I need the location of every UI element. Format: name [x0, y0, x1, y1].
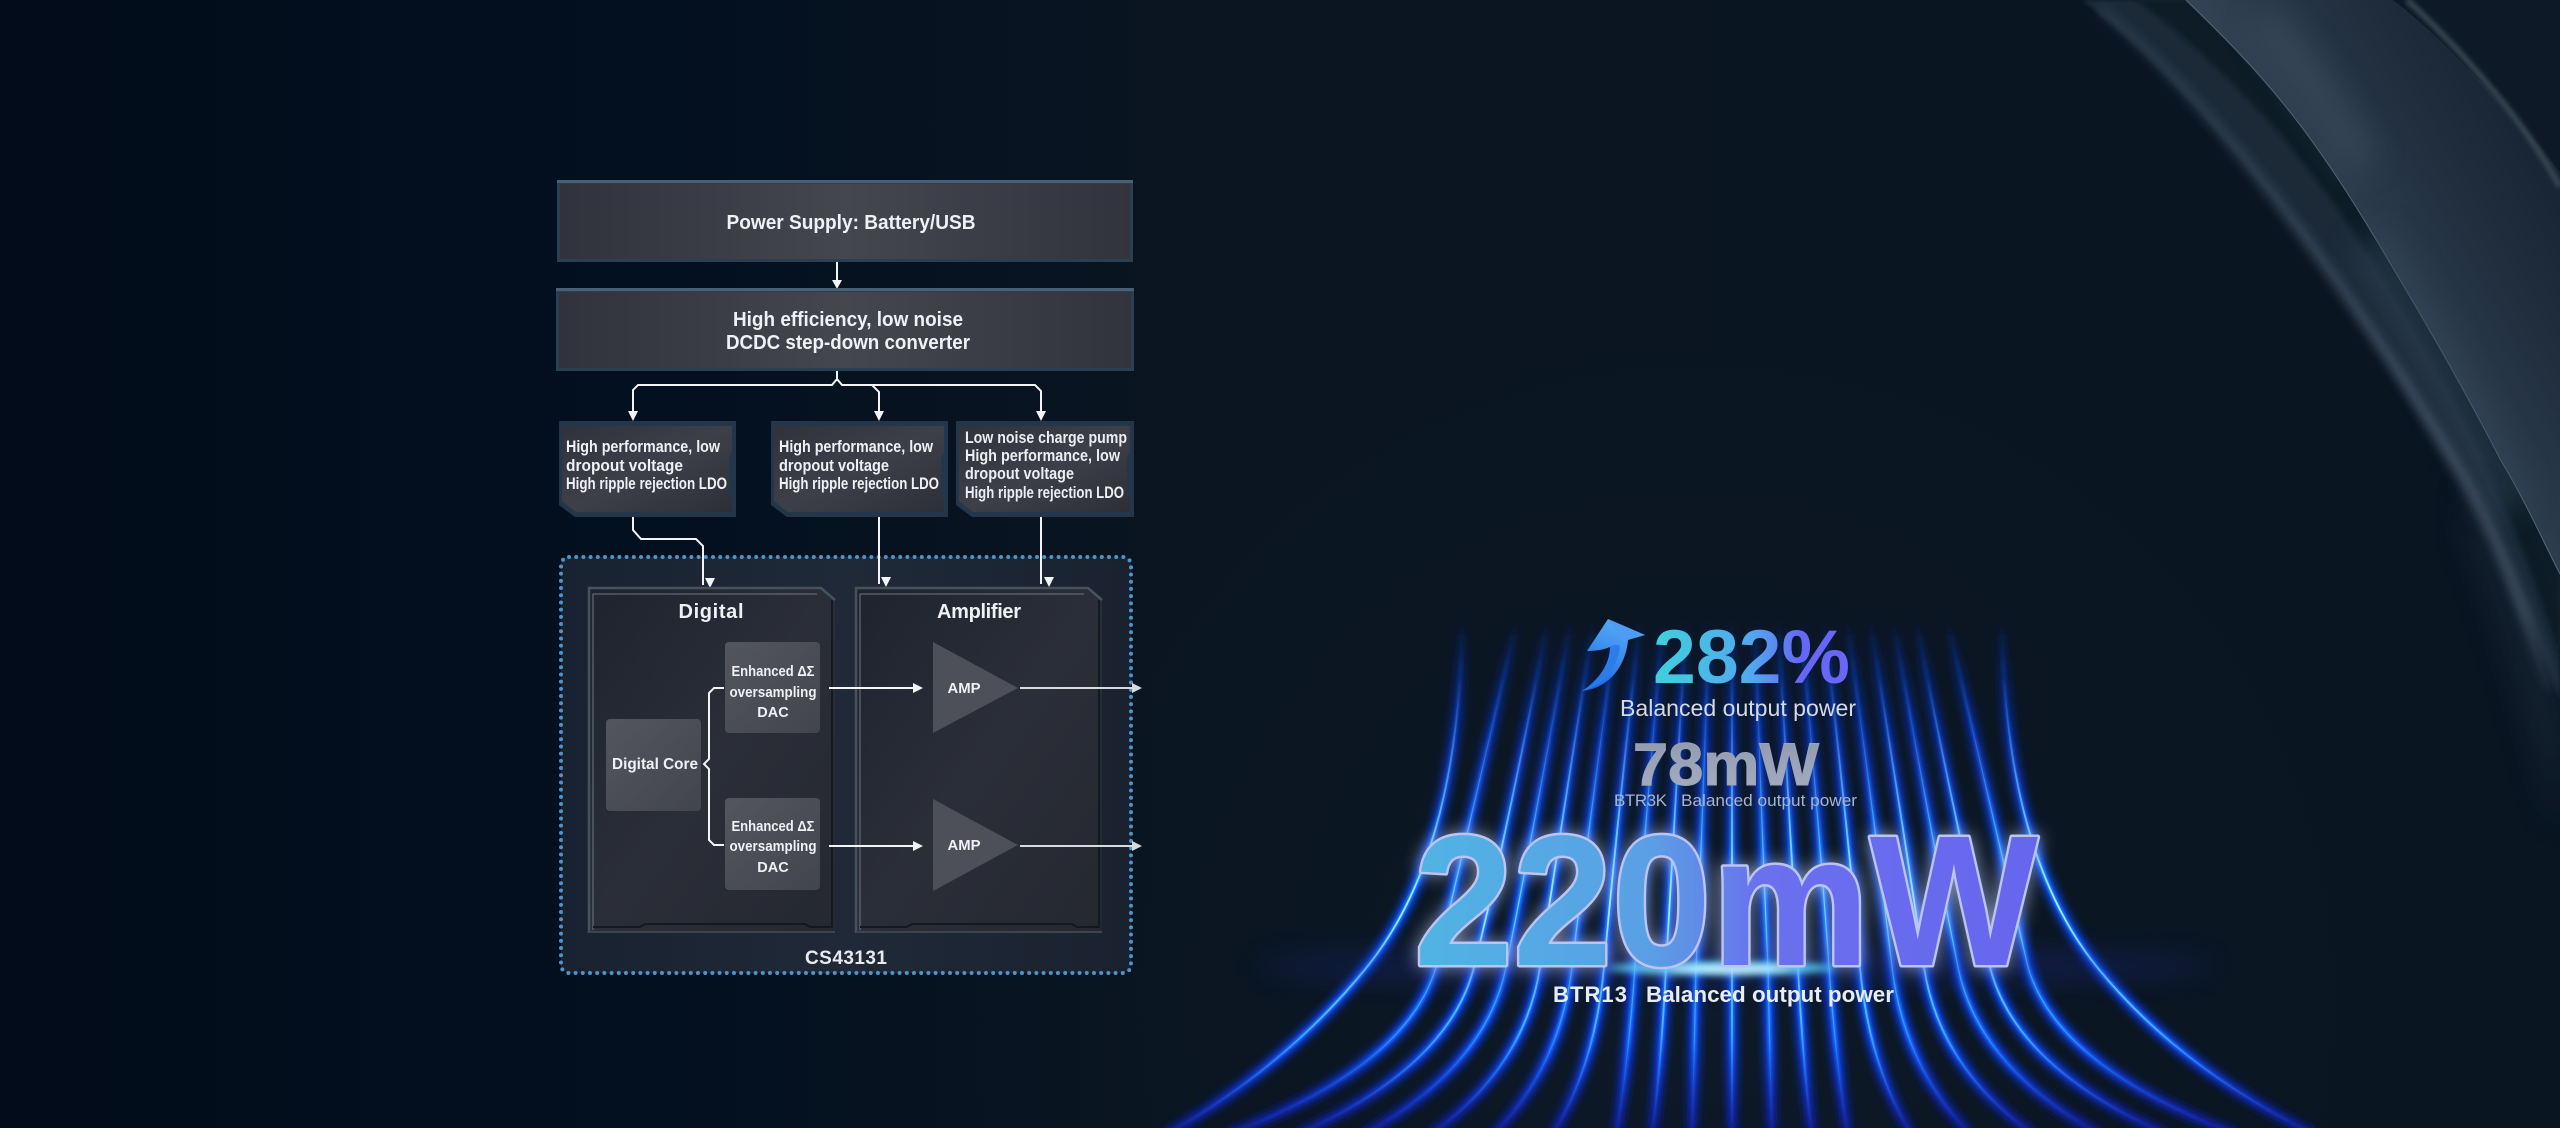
block: AMP lower: AMP: [948, 837, 980, 854]
panel: LDO two: High performance, low: [779, 437, 934, 456]
arrow: Digital Core bracket to DACs: [704, 688, 724, 845]
caption: balanced output power: Balanced output power: [1620, 695, 1856, 721]
panel: LDO one: dropout voltage: [566, 456, 683, 475]
block: Digital Core: Digital Core: [612, 756, 698, 773]
panel: power supply: Power Supply: Battery/USB: [726, 212, 976, 234]
block diagram: [556, 180, 1142, 973]
panel: Digital: [589, 588, 835, 933]
caption: BTR13 balanced output power: Balanced output power: [1646, 982, 1894, 1007]
caption: BTR13 balanced output power: BTR13: [1553, 982, 1627, 1007]
panel: LDO three with charge pump: High performance, low: [965, 446, 1121, 465]
panel: LDO one: High performance, low: [566, 437, 721, 456]
arrow: AMP lower output: [1020, 841, 1142, 851]
icon: rising arrow: [1582, 619, 1645, 691]
heading: Digital: Digital: [678, 601, 744, 623]
panel: LDO one: [559, 421, 736, 517]
arrow: DAC upper to AMP: [829, 683, 923, 693]
arrow: converter branch to three LDOs: [628, 371, 1046, 421]
block: DAC upper: DAC: [757, 705, 789, 721]
panel: CS43131 chip dotted outline: [561, 557, 1131, 973]
heading: Amplifier: Amplifier: [937, 601, 1021, 623]
light fan: blue curved streaks behind the figures: [1165, 620, 2315, 1128]
label: CS43131: CS43131: [805, 948, 887, 969]
arrow: DAC lower to AMP: [829, 841, 923, 851]
arrow: power supply to converter: [832, 262, 842, 289]
background swoosh: top right curved bands: [2082, 0, 2560, 830]
panel: LDO three with charge pump: dropout voltage: [965, 464, 1074, 483]
panel: DCDC converter: DCDC step-down converter: [726, 332, 970, 354]
block: DAC upper: Enhanced ΔΣ: [732, 664, 815, 680]
block: Digital Core: [606, 719, 701, 811]
panel: DCDC converter: [556, 288, 1134, 371]
block: AMP lower: [933, 799, 1018, 891]
block: DAC lower: [725, 798, 820, 890]
panel: LDO three with charge pump: High ripple rejection LDO: [965, 483, 1124, 502]
block: AMP upper: [933, 642, 1018, 733]
panel: LDO three with charge pump: [956, 421, 1134, 517]
arrows: LDO outputs into chip: [633, 517, 1054, 588]
panel: LDO one: High ripple rejection LDO: [566, 474, 727, 493]
panel: LDO two: High ripple rejection LDO: [779, 474, 939, 493]
block: DAC lower: DAC: [757, 860, 789, 876]
block: DAC upper: oversampling: [730, 685, 816, 701]
panel: LDO three with charge pump: Low noise charge pump: [965, 428, 1127, 447]
caption: BTR3K balanced output power: BTR3K: [1614, 791, 1668, 810]
panel: DCDC converter: High efficiency, low noise: [733, 309, 963, 331]
block: AMP upper: AMP: [948, 680, 980, 697]
block: DAC upper: [725, 642, 820, 733]
stat: 282% increase: 282%: [1653, 615, 1850, 700]
stat: BTR13 220mW: 220mW: [1414, 798, 2038, 1005]
stat: BTR3K 78mW: 78mW: [1633, 731, 1819, 798]
block: DAC lower: Enhanced ΔΣ: [732, 819, 815, 835]
caption: BTR3K balanced output power: Balanced output power: [1681, 791, 1857, 810]
panel: Amplifier: [856, 588, 1102, 933]
block: DAC lower: oversampling: [730, 839, 816, 855]
arrow: AMP upper output: [1020, 683, 1142, 693]
panel: power supply: [557, 180, 1133, 262]
panel: LDO two: [771, 421, 948, 517]
panel: LDO two: dropout voltage: [779, 456, 889, 475]
horizontal glow band under the main figure: [1255, 952, 2215, 980]
